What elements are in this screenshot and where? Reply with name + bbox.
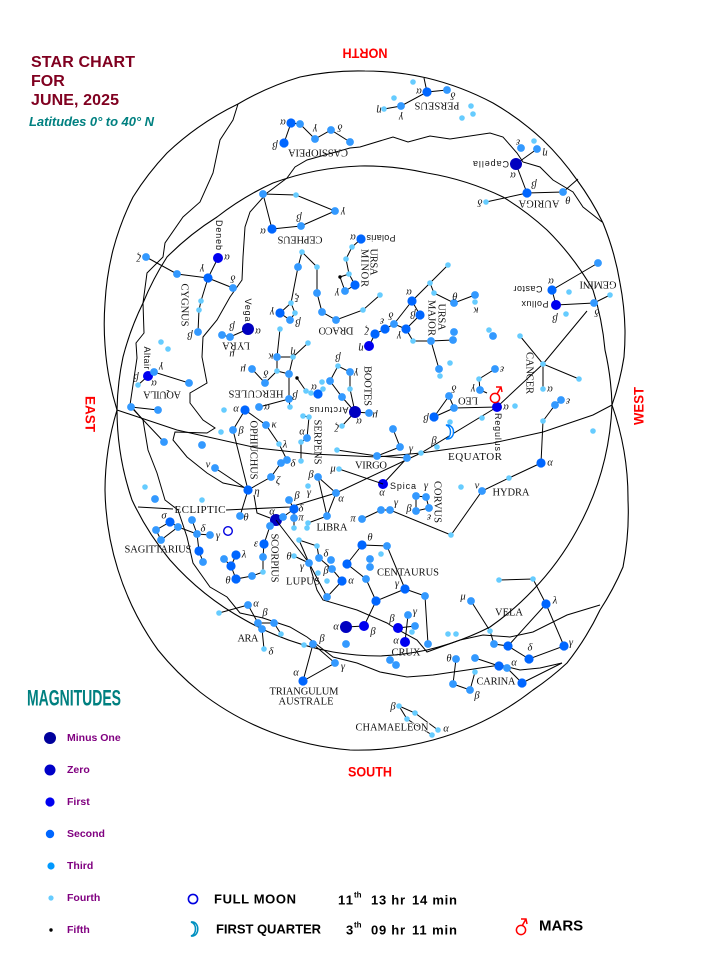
constellation: Ursa Major: η — [358, 342, 364, 354]
constellation: Crux — [388, 606, 421, 658]
constellation: Aquila: γ — [158, 362, 163, 372]
constellation: Ophiuchus: κ — [271, 420, 277, 430]
constellation: Bootes: β — [335, 352, 342, 362]
constellation: Hydra: α — [547, 458, 553, 468]
constellation: Serpens: α — [299, 426, 305, 438]
constellation: Ophiuchus — [142, 404, 297, 524]
legend: third — [47, 860, 93, 872]
constellation: Hercules: δ — [262, 368, 268, 378]
title: FOR — [31, 73, 65, 90]
legend: fifth: Fifth — [67, 924, 90, 936]
legend: minus one: Minus One — [67, 732, 121, 744]
constellation: Draco: DRACO — [318, 324, 354, 336]
constellation: Libra: LIBRA — [316, 522, 348, 534]
equator label: EQUATOR — [448, 451, 503, 463]
constellation: Ursa Minor: Polaris — [366, 233, 396, 243]
compass: east: EAST — [82, 396, 98, 433]
constellation: Vela — [459, 576, 574, 664]
constellation: Ophiuchus: θ — [243, 512, 249, 524]
constellation: Gemini: Castor — [514, 284, 542, 294]
constellation: Scorpius: θ — [225, 576, 231, 586]
constellation: Ursa Minor: α — [350, 232, 356, 242]
constellation: Lyra: β — [229, 320, 236, 332]
constellation: Sagittarius — [124, 510, 221, 566]
constellation: Centaurus: CENTAURUS — [377, 568, 439, 578]
ecliptic — [138, 311, 587, 510]
constellation: Ursa Major: α — [406, 286, 412, 298]
constellation: Ursa Major: ζ — [364, 324, 369, 336]
constellation: Cygnus — [136, 220, 237, 340]
constellation: Corvus: γ — [424, 480, 429, 492]
constellation: Draco — [269, 249, 383, 336]
constellation: Hydra: ε — [565, 396, 570, 406]
constellation: Carina: β — [473, 690, 480, 702]
constellation: Hydra: γ — [394, 498, 399, 508]
constellation: Hercules: β — [292, 390, 299, 400]
constellation: Libra: μ — [329, 464, 336, 474]
constellation: Libra: α — [338, 494, 344, 504]
constellation: Chamaeleon — [356, 702, 449, 738]
constellation: Aquila: Altair — [142, 346, 152, 370]
constellation: Hercules: HERCULES — [228, 388, 284, 398]
constellation: Crux: α — [393, 636, 399, 646]
title: STAR CHART — [31, 54, 135, 71]
constellation: Ursa Major: γ — [396, 330, 401, 342]
constellation: Auriga: θ — [565, 194, 571, 204]
constellation: Hercules: μ — [240, 364, 247, 374]
constellation: Carina: θ — [446, 654, 452, 664]
constellation: Corvus: β — [405, 504, 412, 514]
constellation: Gemini: Pollux — [521, 299, 548, 309]
constellation: Triangulum Australe: AUSTRALE — [278, 696, 334, 708]
title — [29, 54, 155, 129]
constellation: Bootes: ζ — [334, 422, 339, 432]
constellation: Gemini — [514, 259, 616, 324]
constellation: Ursa Minor — [334, 232, 396, 298]
constellation: Draco: γ — [269, 306, 274, 318]
legend: Mars: MARS — [539, 918, 583, 934]
constellation: Corona Borealis: α — [311, 382, 317, 392]
Milky Way boundary: southern branch — [254, 495, 600, 652]
constellation: Bootes: μ — [372, 410, 379, 420]
legend: third: Third — [67, 860, 93, 872]
constellation: Scorpius: λ — [241, 550, 247, 560]
constellation: Cassiopeia: α — [280, 116, 286, 128]
constellation: Aquila: β — [133, 372, 140, 382]
moon phase: full moon: FULL MOON — [214, 892, 296, 906]
legend: zero: Zero — [67, 764, 90, 776]
constellation: Scorpius: ε — [254, 538, 259, 550]
constellation: Carina: CARINA — [476, 676, 516, 688]
constellation: Cassiopeia: γ — [312, 124, 317, 134]
constellation: Hydra — [358, 396, 596, 538]
constellation: Bootes: BOOTES — [362, 366, 372, 406]
constellation: Corvus: CORVUS — [432, 481, 442, 523]
compass: south: SOUTH — [348, 764, 392, 780]
constellation: Auriga: α — [510, 170, 516, 180]
constellation: Lyra — [218, 298, 261, 360]
constellation: Auriga — [473, 136, 578, 208]
constellation: Cepheus — [259, 190, 345, 244]
constellation: Hercules: η — [290, 346, 296, 358]
constellation: Ophiuchus: δ — [291, 458, 297, 470]
compass: north: NORTH — [342, 46, 388, 60]
constellation: Cassiopeia — [272, 116, 354, 158]
constellation: Sagittarius: SAGITTARIUS — [124, 544, 192, 556]
constellation: Aquila: AQUILA — [143, 388, 181, 400]
constellation: Libra: β — [307, 470, 314, 480]
constellation: Ursa Major: URSA — [436, 304, 446, 331]
constellation: Draco: ξ — [294, 292, 299, 302]
constellation: Ophiuchus: λ — [282, 440, 288, 450]
constellation: Scorpius: δ — [299, 504, 305, 514]
constellation: Auriga: ε — [515, 136, 520, 148]
constellation: Cygnus: α — [224, 252, 230, 262]
constellation: Triangulum Australe: γ — [341, 662, 346, 672]
legend: Mars — [516, 918, 583, 935]
constellation: Sagittarius: σ — [161, 510, 167, 522]
constellation: Perseus: δ — [449, 90, 455, 100]
constellation: Triangulum Australe — [270, 634, 346, 708]
constellation: Auriga: β — [531, 178, 538, 190]
constellation: Cassiopeia: CASSIOPEIA — [288, 146, 348, 158]
legend: zero — [44, 764, 90, 776]
constellation: Virgo — [334, 415, 485, 498]
constellation: Lupus — [276, 520, 354, 601]
constellation: Ursa Minor: URSA — [368, 248, 378, 276]
constellation: Ophiuchus: β — [237, 426, 244, 436]
legend: first — [45, 796, 90, 808]
constellation: Virgo: Spica — [390, 481, 416, 491]
ecliptic label: ECLIPTIC — [174, 504, 226, 516]
compass: west: WEST — [632, 386, 646, 425]
constellation: Cepheus: α — [260, 226, 266, 236]
constellation: Ara — [216, 598, 284, 658]
constellation: Leo — [423, 364, 518, 452]
constellation: Lyra: μ — [229, 348, 236, 360]
constellation: Perseus: PERSEUS — [414, 100, 460, 110]
constellation: Draco: β — [295, 316, 302, 328]
moon phase: full moon: 14 min — [412, 892, 457, 908]
constellation: Serpens — [298, 413, 322, 465]
constellation: Ursa Major: θ — [452, 290, 458, 300]
constellation: Leo: δ — [450, 382, 456, 394]
constellation: Cepheus: β — [296, 212, 303, 222]
constellation: Auriga: AURIGA — [518, 198, 560, 208]
constellation: Lupus: LUPUS — [286, 576, 320, 588]
constellation: Ara: δ — [269, 646, 275, 658]
constellation: Ara: α — [253, 598, 259, 610]
constellation: Serpens: SERPENS — [312, 420, 322, 465]
legend: minus one — [44, 732, 121, 744]
constellation: Sagittarius: δ — [201, 524, 207, 534]
legend: second — [46, 828, 105, 840]
constellation: Ursa Major: ε — [379, 316, 384, 326]
constellation: Hercules: α — [264, 402, 270, 412]
moon phase: full moon: 13 hr — [371, 892, 405, 908]
constellation: Crux: γ — [413, 606, 418, 618]
constellation: Vela: λ — [552, 596, 558, 606]
constellation: Ursa Major: κ — [473, 304, 479, 316]
celestial equator — [117, 405, 612, 457]
constellation: Gemini: δ — [593, 306, 599, 318]
constellation: Perseus — [376, 78, 476, 122]
moon phase: first quarter: 09 hr — [371, 922, 405, 938]
constellation: Aquila: α — [151, 378, 157, 388]
constellation: Corona Borealis — [295, 376, 326, 399]
constellation: Triangulum Australe: α — [293, 668, 299, 678]
moon phase: first quarter: FIRST QUARTER — [216, 922, 322, 936]
legend: fifth — [49, 924, 90, 936]
legend: first: First — [67, 796, 90, 808]
constellation: Aquila — [127, 339, 193, 446]
constellation: Libra: π — [350, 514, 356, 524]
constellation: Chamaeleon: CHAMAELEON — [356, 722, 429, 734]
constellation: Scorpius: α — [269, 506, 275, 518]
constellation: Gemini: β — [552, 312, 559, 324]
constellation: Hercules — [228, 326, 311, 412]
constellation: Virgo: γ — [409, 444, 414, 454]
constellation: Triangulum Australe: β — [318, 634, 325, 644]
constellation: Lupus: θ — [286, 552, 292, 562]
constellation: Ophiuchus: OPHIUCHUS — [248, 420, 258, 480]
constellation: Cancer: α — [547, 384, 553, 394]
constellation: Chamaeleon: α — [443, 724, 449, 734]
constellation: Cygnus: ζ — [136, 252, 141, 262]
constellation: Lupus: α — [348, 576, 354, 586]
constellation: Vela: VELA — [495, 608, 523, 618]
constellation: Ophiuchus: ζ — [276, 476, 281, 486]
constellation: Centaurus — [333, 532, 459, 669]
constellation: Cygnus: Deneb — [214, 220, 224, 250]
constellation: Centaurus: α — [333, 622, 339, 632]
constellation: Auriga: δ — [476, 196, 482, 208]
constellation: Lupus: δ — [324, 548, 330, 560]
constellation: Libra: γ — [307, 488, 312, 498]
Milky Way boundary: outer — [130, 104, 562, 677]
constellation: Vela: μ — [459, 592, 466, 602]
constellation: Libra — [304, 464, 383, 534]
legend: magnitudes heading: MAGNITUDES — [27, 686, 121, 710]
constellation: Lyra: LYRA — [222, 340, 250, 350]
constellation: Virgo: β — [430, 436, 437, 446]
constellation: Cepheus: γ — [340, 206, 345, 218]
sky boundary: southern horizon arc — [105, 166, 628, 750]
moon phase: full moon: th — [354, 890, 362, 900]
constellation: Scorpius — [220, 490, 305, 586]
constellation: Perseus: α — [416, 86, 422, 96]
icon: full moon position — [224, 527, 232, 535]
constellation: Virgo: VIRGO — [355, 460, 387, 472]
moon phase: full moon: 11 — [338, 892, 353, 908]
constellation: Cygnus: β — [187, 330, 194, 340]
constellation: Ursa Minor: γ — [334, 288, 339, 298]
constellation: Vela: γ — [569, 638, 574, 648]
sky boundary: northern horizon arc — [104, 71, 625, 656]
constellation: Cancer: CANCER — [524, 352, 534, 394]
constellation: Corvus — [405, 480, 442, 523]
constellation: Ursa Major: β — [410, 308, 417, 320]
constellation: Bootes: Arcturus — [309, 405, 348, 415]
constellation: Virgo: α — [379, 488, 385, 498]
constellation: Hercules: κ — [268, 350, 274, 362]
constellation: Leo: LEO — [458, 394, 478, 406]
moon phase: first quarter: th — [354, 920, 362, 930]
constellation: Triangulum Australe: TRIANGULUM — [270, 686, 339, 698]
constellation: Leo: ε — [499, 364, 504, 374]
constellation: Ophiuchus: ν — [206, 460, 211, 470]
constellation: Ursa Major: δ — [387, 310, 393, 320]
moon phase: full moon — [188, 890, 457, 908]
constellation: Sagittarius: γ — [216, 530, 221, 542]
constellation: Leo: γ — [470, 384, 475, 394]
legend: fourth — [48, 892, 100, 904]
constellation: Perseus: γ — [398, 112, 403, 122]
constellation: Lupus: β — [322, 566, 329, 576]
constellation: Perseus: η — [376, 104, 382, 116]
constellation: Scorpius: π — [298, 512, 304, 524]
constellation: Ara: ARA — [238, 634, 259, 644]
constellation: Vela: δ — [528, 642, 534, 654]
constellation: Carina — [446, 654, 562, 702]
constellation: Auriga: η — [542, 148, 548, 158]
moon phase: first quarter: 11 min — [412, 922, 457, 938]
constellation: Carina: α — [511, 658, 517, 668]
constellation: Crux: CRUX — [392, 648, 421, 658]
constellation: Leo: β — [423, 412, 430, 424]
title: JUNE, 2025 — [31, 92, 119, 109]
constellation: Ursa Minor: MINOR — [358, 249, 370, 287]
constellation: Centaurus: β — [369, 626, 376, 638]
constellation: Crux: β — [388, 614, 395, 624]
constellation: Centaurus: γ — [395, 578, 400, 590]
constellation: Cygnus: CYGNUS — [178, 284, 190, 327]
title: Latitudes 0° to 40° N — [29, 114, 155, 129]
legend: second: Second — [67, 828, 105, 840]
legend: fourth: Fourth — [67, 892, 100, 904]
constellation: Gemini: GEMINI — [579, 278, 616, 290]
constellation: Lupus: γ — [300, 562, 305, 572]
constellation: Leo: α — [503, 402, 509, 412]
constellation: Scorpius: SCORPIUS — [268, 534, 280, 583]
icon: Mars position — [490, 387, 502, 403]
constellation: Hydra: ν — [475, 480, 480, 492]
constellation: Chamaeleon: β — [389, 702, 396, 712]
constellation: Ophiuchus: α — [233, 404, 239, 414]
constellation: Leo: Regulus — [493, 413, 503, 452]
constellation: Bootes — [309, 352, 379, 432]
moon phase: first quarter: 3 — [346, 922, 353, 938]
constellation: Cassiopeia: δ — [336, 122, 342, 132]
constellation: Ursa Major — [358, 262, 497, 379]
constellation: Centaurus: θ — [367, 532, 373, 544]
constellation: Ophiuchus: η — [254, 486, 260, 498]
constellation: Cygnus: δ — [229, 272, 235, 284]
constellation: Cygnus: γ — [199, 264, 204, 274]
constellation: Hydra: HYDRA — [492, 488, 530, 498]
constellation: Lyra: Vega — [243, 298, 253, 322]
constellation: Lyra: α — [255, 326, 261, 336]
constellation: Scorpius: β — [293, 490, 300, 502]
constellation: Cassiopeia: β — [272, 140, 279, 150]
constellation: Ursa Major: MAJOR — [426, 300, 436, 336]
constellation: Gemini: α — [548, 276, 554, 286]
constellation: Auriga: Capella — [473, 159, 509, 169]
constellation: Bootes: α — [356, 416, 362, 426]
constellation: Bootes: γ — [353, 368, 358, 378]
Milky Way boundary: inner — [173, 133, 602, 488]
moon phase: first quarter — [191, 920, 457, 938]
constellation: Cepheus: CEPHEUS — [277, 234, 322, 244]
icon: first quarter moon position — [446, 425, 454, 439]
constellation: Ara: β — [261, 608, 268, 618]
constellation: Cancer — [517, 333, 582, 394]
constellation: Corvus: ε — [426, 512, 431, 522]
